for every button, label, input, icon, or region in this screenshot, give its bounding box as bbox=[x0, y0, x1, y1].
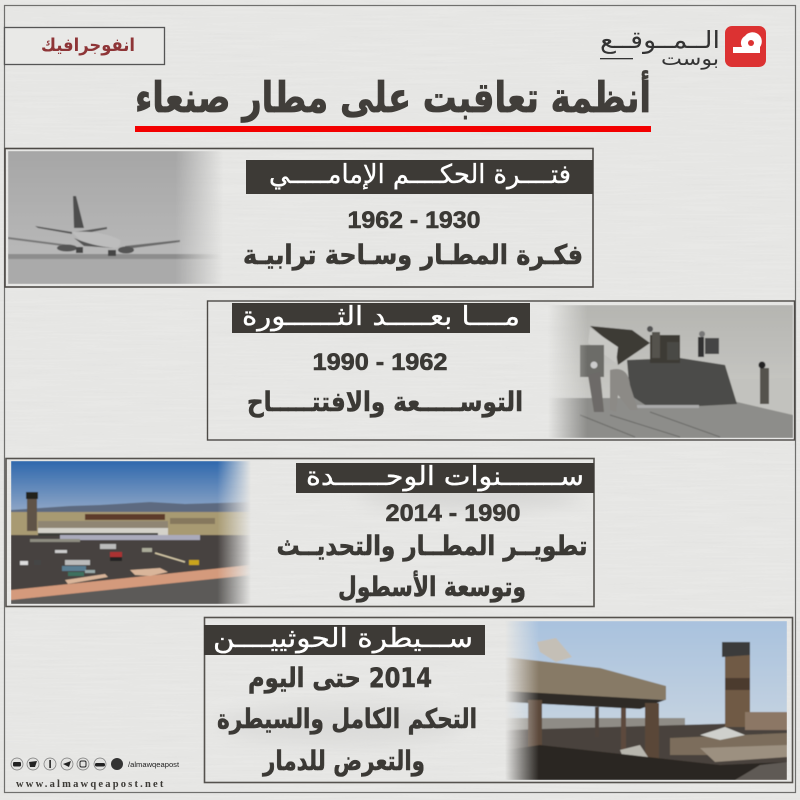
panel: unification years bbox=[6, 458, 594, 606]
heading bar: فتــــرة الحكــــم الإمامـــــي bbox=[269, 160, 571, 190]
panel: after the revolution bbox=[208, 301, 794, 440]
description: فكـرة المطـار وسـاحة ترابيـة bbox=[243, 240, 583, 271]
heading bar: ســـيطرة الحوثييــــن bbox=[213, 624, 473, 654]
website address: www.almawqeapost.net bbox=[16, 779, 166, 790]
date: 1990 - 1962 bbox=[312, 349, 448, 376]
heading bar: ســـــــنوات الوحــــــدة bbox=[306, 462, 584, 492]
handle: /almawqeapost bbox=[128, 760, 180, 769]
logo: Almawqea Post bbox=[600, 26, 766, 70]
icon: red logo mark bbox=[725, 26, 766, 67]
description line 1: تطويــر المطــار والتحديــث bbox=[276, 531, 588, 562]
heading bar: مــــا بعـــــد الثــــــورة bbox=[242, 302, 520, 332]
photo: airport terminal in colour bbox=[11, 461, 251, 604]
description line 2: وتوسعة الأسطول bbox=[338, 570, 526, 603]
description line 2: والتعرض للدمار bbox=[261, 746, 425, 777]
logo wordmark: الــمــوقــع bbox=[600, 26, 720, 54]
photo: airplane on runway bbox=[8, 151, 223, 284]
title: أنظمة تعاقبت على مطار صنعاء bbox=[135, 70, 651, 122]
tag: infographic label bbox=[4, 28, 164, 64]
logo wordmark: بوست bbox=[661, 48, 719, 70]
date: 2014 - 1990 bbox=[386, 500, 520, 527]
logo wordmark bbox=[600, 26, 720, 70]
description: التوســـــعة والافتتـــــاح bbox=[247, 387, 523, 418]
photo: destroyed terminal and tower bbox=[505, 621, 787, 780]
panel: Houthi control bbox=[204, 618, 792, 782]
description line 1: التحكم الكامل والسيطرة bbox=[217, 704, 477, 735]
date: 2014 حتى اليوم bbox=[248, 663, 432, 694]
panel: imamate period bbox=[5, 148, 593, 287]
social icons and handle bbox=[11, 758, 180, 770]
photo: paving machine bbox=[548, 305, 793, 438]
date: 1962 - 1930 bbox=[348, 207, 480, 234]
title underline bbox=[135, 126, 651, 132]
tag: infographic label: انفوجرافيك bbox=[41, 35, 135, 56]
